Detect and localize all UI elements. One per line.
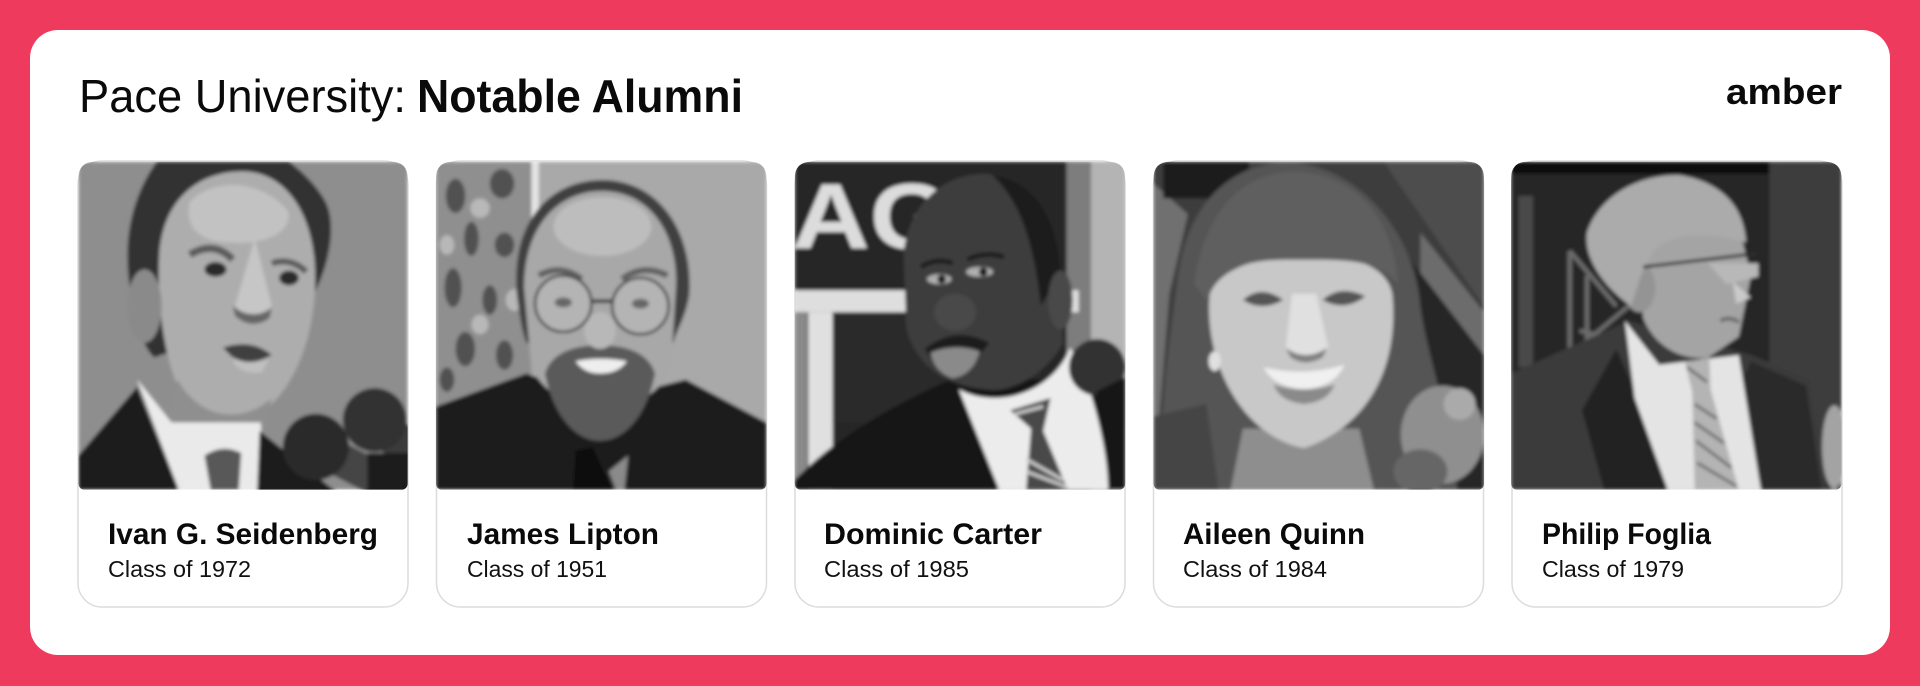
class year: Class of 1985 <box>824 556 969 582</box>
card: Dominic Carter <box>792 161 1125 607</box>
card: James Lipton <box>436 161 767 607</box>
photo: Aileen Quinn <box>1153 162 1484 493</box>
class year: Class of 1972 <box>108 556 251 582</box>
card: Aileen Quinn <box>1153 161 1484 607</box>
class year: Class of 1951 <box>467 556 607 582</box>
name: Ivan G. Seidenberg <box>108 518 378 551</box>
name: Philip Foglia <box>1542 518 1712 551</box>
card: Philip Foglia <box>1511 161 1847 607</box>
class year: Class of 1979 <box>1542 556 1684 582</box>
logo: amber: amber <box>1726 71 1842 112</box>
title bold part: Notable Alumni <box>417 70 743 122</box>
photo: James Lipton <box>436 162 767 490</box>
title: Pace University: <box>79 70 406 122</box>
card: Ivan G. Seidenberg <box>78 161 422 607</box>
photo: Philip Foglia <box>1511 162 1847 490</box>
class year: Class of 1984 <box>1183 556 1327 582</box>
photo: Dominic Carter <box>792 162 1125 492</box>
photo: Ivan G. Seidenberg <box>78 162 422 496</box>
name: James Lipton <box>467 518 659 551</box>
name: Dominic Carter <box>824 518 1043 551</box>
photo: Dominic Carter: AGE <box>792 165 1025 269</box>
name: Aileen Quinn <box>1183 518 1365 551</box>
